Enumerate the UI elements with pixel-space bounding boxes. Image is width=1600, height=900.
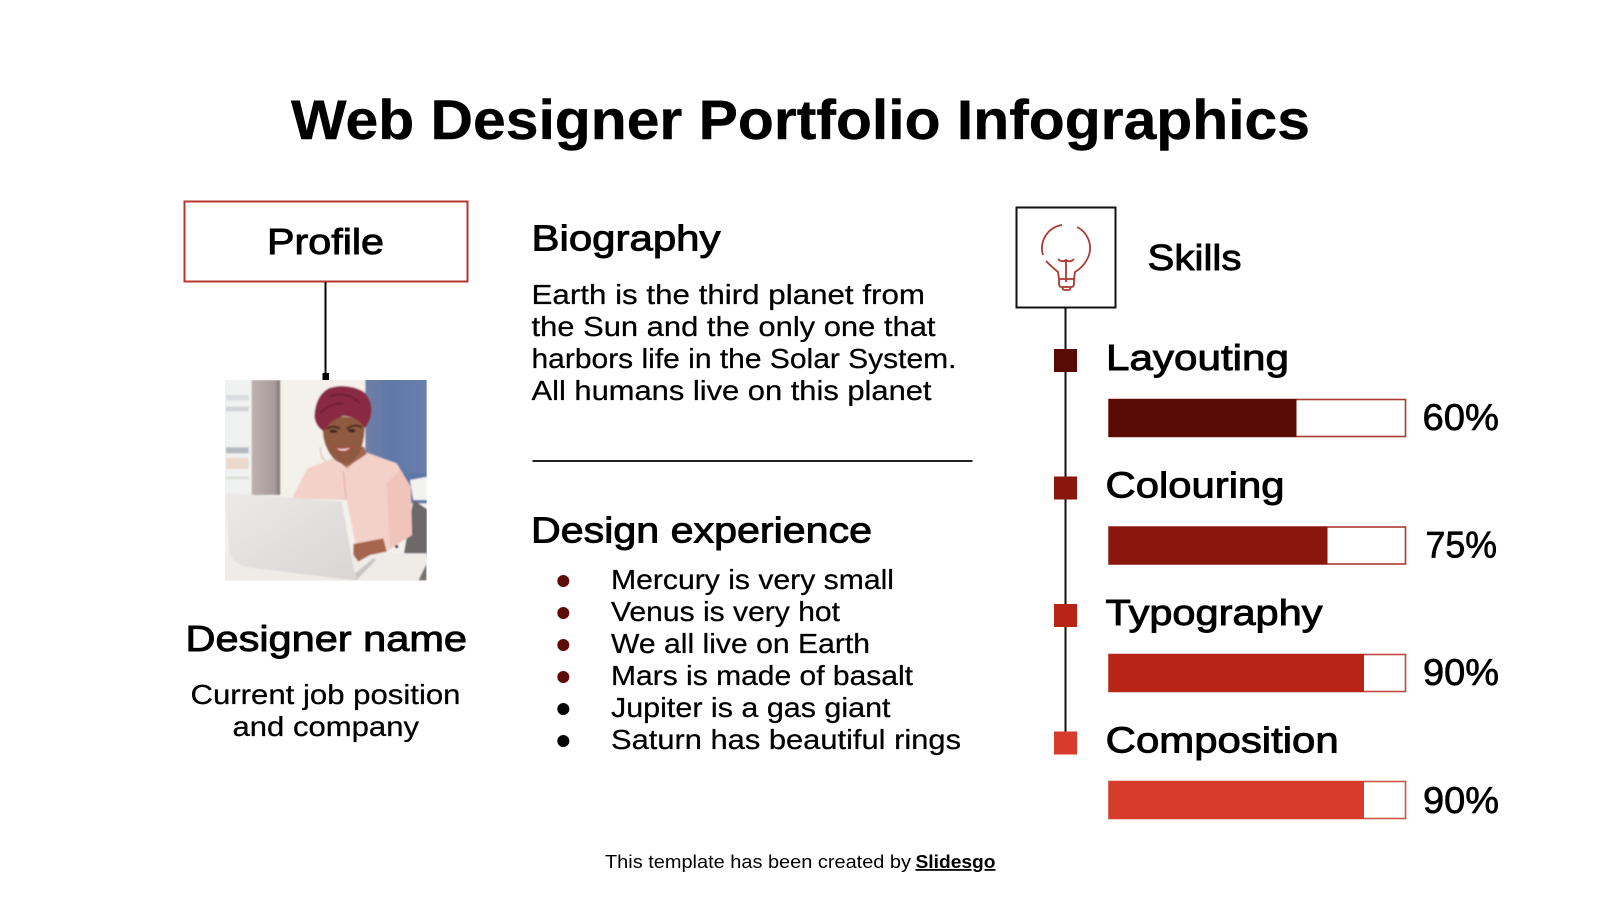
footer credit: Slidesgo xyxy=(916,852,996,872)
panel: design experience xyxy=(531,510,961,755)
skill: colouring: 75% xyxy=(1426,524,1497,566)
biography text: Earth is the third planet from xyxy=(532,279,925,310)
biography text: All humans live on this planet xyxy=(532,375,932,406)
skill: composition: 90% xyxy=(1423,780,1499,821)
panel: skills xyxy=(1016,208,1499,821)
icon: light bulb xyxy=(1016,208,1116,308)
photo of designer at laptop xyxy=(220,377,433,587)
job position text: and company xyxy=(232,711,419,742)
panel: biography xyxy=(532,218,956,406)
panel: profile xyxy=(184,202,468,742)
skill: typography xyxy=(1054,592,1499,693)
biography heading: Biography xyxy=(532,218,720,258)
biography text: harbors life in the Solar System. xyxy=(532,343,956,374)
bullet list: Venus is very hot xyxy=(611,596,840,627)
timeline line xyxy=(1064,307,1066,733)
profile heading box: Profile xyxy=(267,221,384,262)
bullet list xyxy=(557,564,961,755)
skill: layouting: 60% xyxy=(1422,397,1499,438)
footer credit: This template has been created by xyxy=(605,852,911,872)
job position text xyxy=(190,679,460,742)
profile heading box xyxy=(184,202,468,282)
design experience heading: Design experience xyxy=(531,510,872,550)
skill: composition xyxy=(1054,720,1499,821)
title: Web Designer Portfolio Infographics xyxy=(291,88,1310,151)
bullet list: Mars is made of basalt xyxy=(611,660,913,691)
skill: typography: Typography xyxy=(1106,592,1322,633)
job position text: Current job position xyxy=(190,679,460,710)
bullet list: Saturn has beautiful rings xyxy=(611,724,961,755)
bullet list: We all live on Earth xyxy=(611,628,870,659)
skill: layouting xyxy=(1054,337,1499,438)
bullet list: Jupiter is a gas giant xyxy=(611,692,891,723)
skill: colouring: Colouring xyxy=(1106,464,1284,506)
skill: typography: 90% xyxy=(1423,652,1499,693)
designer name: Designer name xyxy=(186,618,467,659)
bullet list: Mercury is very small xyxy=(611,564,894,595)
biography text xyxy=(532,279,956,406)
biography text: the Sun and the only one that xyxy=(532,311,936,342)
connector line xyxy=(322,282,329,380)
skill: colouring xyxy=(1054,464,1497,566)
skill: composition: Composition xyxy=(1106,720,1339,760)
skill: layouting: Layouting xyxy=(1106,337,1289,378)
skills heading: Skills xyxy=(1148,237,1242,278)
